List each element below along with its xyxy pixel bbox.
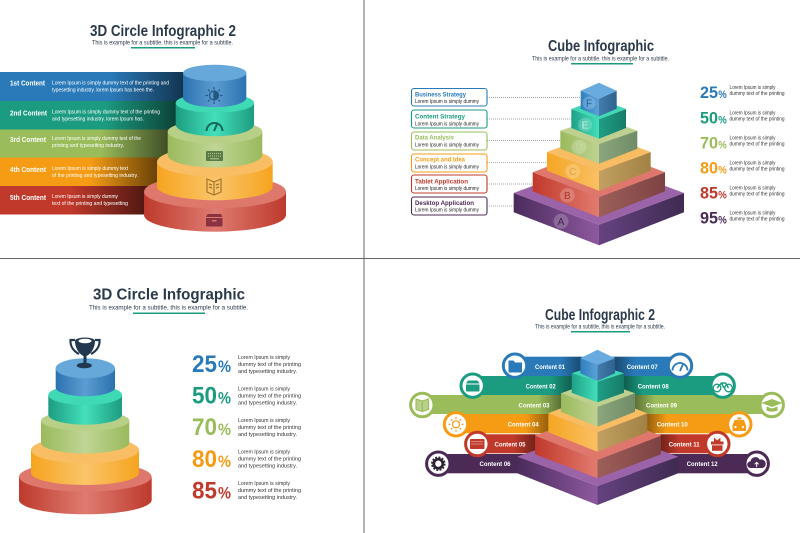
content row 4 [0,158,162,186]
percent list [192,351,301,504]
content row 5: 5th Content [10,193,46,202]
ribbon labels: Content 12 [687,461,718,468]
label boxes: Content Strategy [415,114,466,120]
percent list: 70 [700,134,718,152]
percent list: 50 [192,382,217,410]
percent list: and typesetting industry. [238,495,297,501]
label boxes: Desktop Application [415,201,474,207]
panel: Cube Infographic 2 [411,307,783,505]
percent list: % [718,164,727,176]
percent list: % [218,420,231,439]
percent list: and typesetting industry. [238,432,297,438]
content row 1: Lorem Ipsum is simply dummy text of the printing and [52,80,169,86]
content row 2 [0,101,182,130]
label boxes: Data Analysis [415,136,455,142]
content row 4: Lorem Ipsum is simply dummy text [52,166,129,172]
percent list: dummy text of the printing [238,456,301,462]
ribbon labels: Content 03 [518,402,550,410]
percent list [700,83,785,228]
content row 1: 1st Content [10,78,45,88]
content row 3 [0,130,172,158]
panel: 3D Circle Infographic 2 [0,23,286,232]
ribbon labels: Content 05 [494,442,526,448]
circle stack [19,358,152,514]
percent list: dummy text of the printing [730,192,785,198]
percent list: dummy text of the printing [238,425,301,431]
label boxes: Lorem Ipsum is simply dummy [415,142,479,148]
percent list: Lorem Ipsum is simply [730,160,776,166]
percent list: 50 [700,108,718,128]
percent list: 25 [700,83,718,102]
panel: 3D Circle Infographic [19,286,301,514]
heading: Cube Infographic [548,38,654,55]
icon: trophy [70,338,100,368]
percent list: % [218,452,231,471]
ribbon labels: Content 09 [646,402,677,410]
panel: Cube Infographic [412,38,785,245]
content row 4: 4th Content [10,165,46,174]
cube pyramid: D [575,143,583,154]
ribbon labels: Content 06 [480,461,511,468]
label boxes: Lorem Ipsum is simply dummy [415,99,479,105]
icon: sun [448,417,464,432]
icon: basket [206,214,222,226]
ribbon labels: Content 11 [669,442,700,448]
percent list: and typesetting industry. [238,463,297,469]
percent list: Lorem Ipsum is simply [730,186,776,192]
icon: keyboard [206,151,223,161]
cube pyramid: B [564,191,571,202]
percent list: 80 [192,446,217,473]
icon: gauge [672,363,688,371]
percent list: 70 [192,414,217,441]
icon: car [732,418,746,431]
percent list: Lorem Ipsum is simply [730,110,776,116]
ribbon labels: Content 02 [526,384,556,390]
content row 2: Lorem Ipsum is simply dummy text of the printing [52,110,160,116]
heading: Cube Infographic 2 [545,307,655,324]
ribbon bars [422,357,772,473]
percent list: dummy text of the printing [730,216,785,222]
percent list: dummy text of the printing [730,142,785,148]
icon: gift [711,438,724,451]
content row 1: typesetting industry. lorem Ipsum has been the. [52,88,154,94]
percent list: 80 [700,158,718,178]
percent list: % [718,190,727,202]
content row 3: 3rd Content [10,135,46,144]
content row 5: text of the printing and typesetting [52,201,128,207]
percent list: 95 [700,208,718,228]
percent list: Lorem Ipsum is simply [730,210,776,216]
icon: keyboard [470,439,484,449]
ribbon labels: Content 10 [657,422,688,428]
heading: 3D Circle Infographic 2 [90,23,236,40]
percent list: % [218,357,231,376]
heading: 3D Circle Infographic [93,286,245,304]
icon: gear [432,457,445,470]
icon: graduation cap [762,399,782,412]
cube pyramid: F [586,99,592,110]
label boxes: Lorem Ipsum is simply dummy [415,186,479,192]
percent list: % [218,388,231,408]
label boxes: Business Strategy [415,92,467,98]
percent list: Lorem Ipsum is simply [238,449,290,455]
ribbon labels [480,364,718,468]
subtitle: This is example for a subtitle, this is example for a subtitle. [89,304,248,312]
content row 2: and typesetting industry. lorem Ipsum has. [52,116,144,122]
percent list: Lorem Ipsum is simply [238,355,290,361]
cube pyramid: E [582,120,589,131]
percent list: % [718,140,727,152]
content row 5 [0,186,150,214]
content row 3: printing and typesetting industry. [52,143,124,149]
content row 1 [0,72,190,101]
icon: book [207,179,221,195]
subtitle: This is example for a subtitle, this is example for a subtitle. [535,324,665,330]
label boxes: Concept and Idea [415,158,466,164]
label boxes [412,88,487,215]
icon: book [416,399,429,412]
percent list: Lorem Ipsum is simply [238,386,290,392]
cube pyramid [514,83,684,245]
label boxes: Lorem Ipsum is simply dummy [415,122,479,128]
ribbon labels: Content 04 [508,422,539,428]
icon badges [411,354,783,475]
percent list: dummy text of the printing [730,166,785,172]
icon: gauge [206,123,222,131]
percent list: dummy text of the printing [238,488,301,494]
percent list: 25 [192,351,217,378]
content row 4: of the printing and typesetting industry. [52,173,138,179]
percent list: % [718,89,727,101]
label boxes: Lorem Ipsum is simply dummy [415,164,479,170]
cube pyramid [517,350,678,505]
percent list: dummy text of the printing [730,91,785,97]
percent list: % [718,214,727,226]
percent list: and typesetting industry. [238,369,297,375]
ribbon labels: Content 07 [627,364,658,371]
percent list: % [218,484,231,502]
percent list: % [718,114,727,126]
cube pyramid: A [558,217,565,228]
icon: sun [206,87,222,104]
content row 3: Lorem Ipsum is simply dummy text of the [52,136,141,142]
label boxes: Lorem Ipsum is simply dummy [415,208,479,214]
circle stack [144,65,286,232]
icon: folder [508,360,522,372]
icon: cloud upload [747,457,766,468]
icon: bicycle [713,383,732,392]
label boxes: Tablet Application [415,180,468,186]
percent list: 85 [192,478,217,504]
percent list: Lorem Ipsum is simply [238,418,290,424]
content row 5: Lorem Ipsum is simply dummy [52,194,118,200]
cube pyramid: C [569,167,576,178]
icon: basket [466,380,480,392]
percent list: Lorem Ipsum is simply [730,136,776,142]
percent list: dummy text of the printing [238,362,301,368]
percent list: dummy text of the printing [238,393,301,399]
percent list: Lorem Ipsum is simply [730,85,776,91]
ribbon labels: Content 08 [638,384,669,390]
ribbon labels: Content 01 [535,364,565,371]
subtitle: This is example for a subtitle. this is example for a subtitle. [532,56,669,62]
percent list: 85 [700,184,718,202]
percent list: and typesetting industry. [238,400,297,406]
subtitle: This is example for a subtitle, this is example for a subtitle. [92,40,233,46]
content row 2: 2nd Content [10,108,47,118]
percent list: dummy text of the printing [730,116,785,122]
percent list: Lorem Ipsum is simply [238,481,290,487]
